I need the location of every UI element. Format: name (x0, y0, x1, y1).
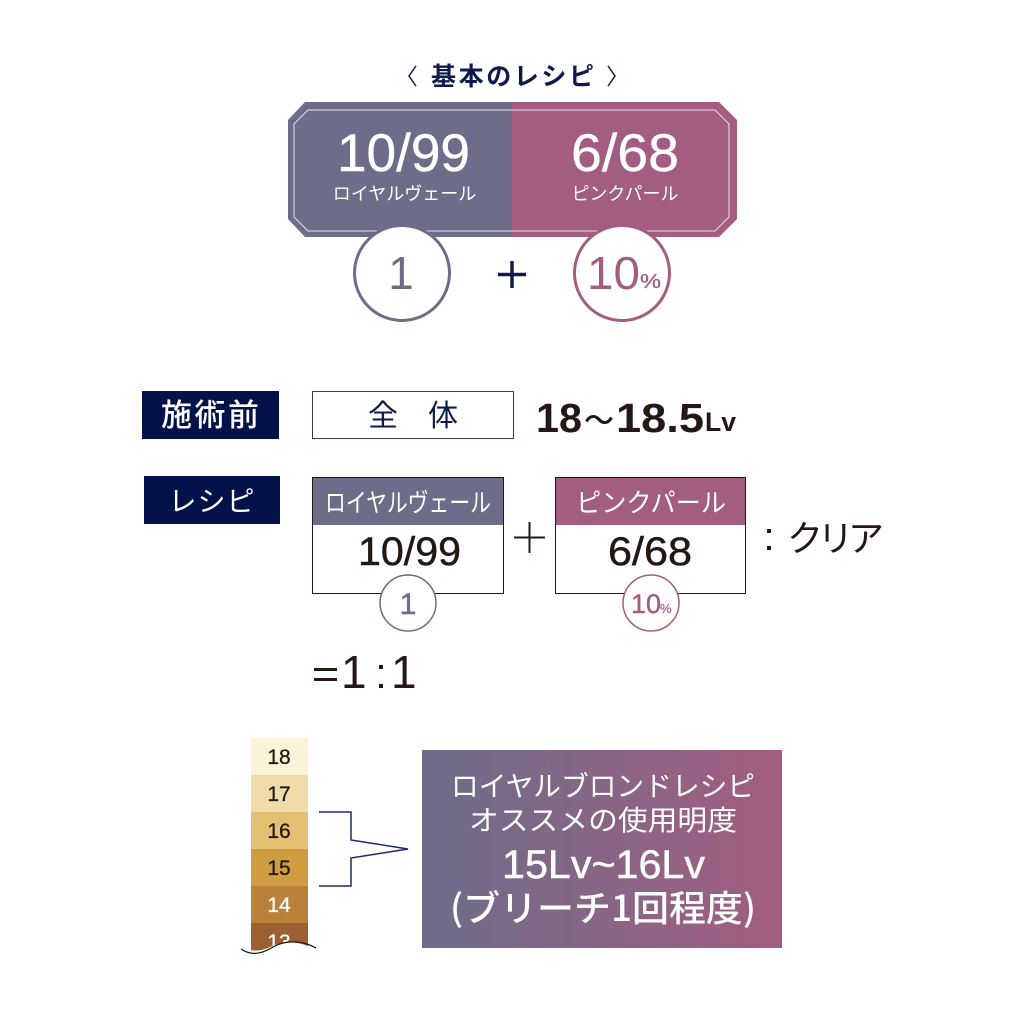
card: royal veil: 10/99 (358, 530, 461, 574)
royal veil shade number: 10/99 (337, 124, 470, 183)
royal veil name: ロイヤルヴェール (333, 180, 476, 206)
lightness level before treatment: 18.5 (616, 395, 704, 441)
pink pearl shade number: 6/68 (571, 124, 679, 183)
lightness level before treatment: Lv (705, 407, 736, 437)
ratio circle: 10%: % (640, 271, 661, 293)
label: before treatment: 施術前 (161, 390, 259, 435)
ratio circle: 10% (574, 226, 670, 320)
card: pink pearl: % (660, 601, 672, 616)
lightness scale (241, 738, 316, 954)
panel: recommended lightness: オススメの使用明度 (469, 799, 737, 839)
title: basic recipe: 基本のレシピ (431, 57, 594, 93)
panel: recommended lightness (422, 750, 782, 948)
lightness level before treatment: 〜 (584, 396, 614, 440)
box: whole head: 全 体 (368, 391, 458, 435)
box: whole head (312, 391, 514, 438)
card: pink pearl: 10 (631, 589, 661, 619)
lightness scale: 16 (267, 820, 291, 843)
pink pearl name: ピンクパール (571, 180, 679, 206)
panel: recommended lightness: 15Lv~16Lv (502, 843, 705, 887)
mixing ratio (314, 646, 417, 698)
card: royal veil: 1 (400, 588, 416, 621)
card: pink pearl: 6/68 (608, 530, 692, 574)
lightness scale: 17 (267, 783, 291, 806)
ratio circle: 1: 1 (388, 247, 414, 299)
ratio circle: 10%: 10 (587, 247, 640, 299)
plus sign (514, 522, 545, 553)
ratio circle: 1 (354, 226, 450, 320)
result: clear: クリア (787, 510, 884, 562)
panel: basic recipe colour plate (288, 102, 737, 237)
panel: recommended lightness: ロイヤルブロンドレシピ (451, 765, 755, 805)
label: recipe (144, 476, 280, 524)
panel: recommended lightness: (ブリーチ1回程度) (450, 880, 756, 932)
label: recipe: レシピ (168, 480, 256, 520)
plus sign (498, 261, 526, 288)
bracket arrow (319, 812, 408, 886)
lightness scale: 15 (267, 857, 291, 880)
card: royal veil: ロイヤルヴェール (325, 483, 491, 520)
mixing ratio: 1 (341, 646, 367, 698)
mixing ratio: 1 (391, 646, 417, 698)
lightness level before treatment (536, 395, 736, 441)
label: before treatment (142, 390, 279, 439)
lightness scale: 13 (267, 931, 291, 954)
card: pink pearl (556, 478, 746, 631)
card: pink pearl: ピンクパール (576, 483, 726, 520)
card: royal veil (312, 478, 504, 631)
lightness level before treatment: 18 (536, 395, 582, 441)
lightness scale: 14 (267, 894, 291, 917)
lightness scale: 18 (267, 746, 291, 769)
